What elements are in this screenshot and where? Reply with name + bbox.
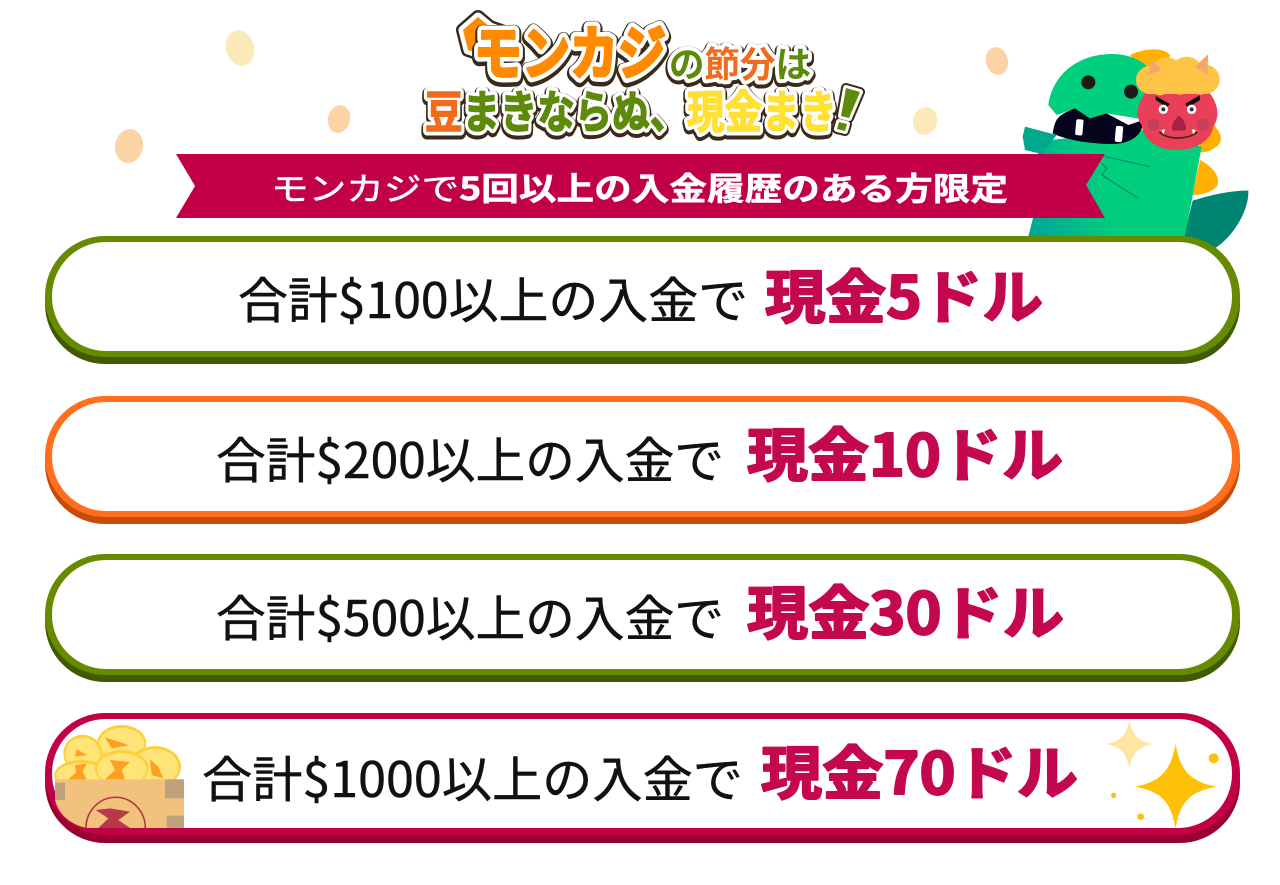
box emblem <box>86 797 145 828</box>
logo line 1: brand: の節分は <box>669 38 811 90</box>
reward text: 現金70ドル <box>761 727 1078 811</box>
pill: $100 tier <box>45 236 1240 364</box>
logo line 2: tagline: 豆まきならぬ、現金まき <box>425 76 837 141</box>
arm <box>1023 127 1057 154</box>
oni mouth <box>1159 132 1197 138</box>
tail <box>1184 191 1248 248</box>
logo line 1: brand: の節分は <box>669 36 811 88</box>
oni face <box>1138 93 1217 150</box>
requirement text: 合計$100以上の入金で <box>238 262 748 333</box>
requirement text: 合計$500以上の入金で <box>216 580 724 651</box>
arm creases <box>1102 157 1150 198</box>
head <box>1048 54 1157 120</box>
oni hair <box>1136 57 1220 95</box>
pill: $1000 tier <box>45 713 1240 843</box>
logo line 1: brand: モンカジ <box>474 7 666 91</box>
mouth <box>1053 108 1143 144</box>
body <box>1027 130 1202 243</box>
ribbon banner <box>176 154 1105 218</box>
decorative beans <box>112 27 1011 165</box>
logo line 1: brand: モンカジ <box>474 9 666 93</box>
eyes <box>1081 75 1095 89</box>
ribbon text: モンカジで 5回以上の入金履歴のある方限定 <box>271 164 1008 210</box>
reward text: 現金10ドル <box>747 409 1063 493</box>
pill: $500 tier <box>45 554 1240 682</box>
logo line 1: brand: モンカジ <box>474 7 666 91</box>
box <box>55 779 184 828</box>
coins <box>54 725 181 790</box>
logo line 2: tagline: 豆まきならぬ、現金まき <box>425 76 837 141</box>
oni horns <box>1148 58 1162 75</box>
logo line 1: brand: の節分は <box>669 36 811 88</box>
oni brows <box>1156 95 1200 107</box>
icon: sparkles <box>1105 719 1219 828</box>
oni nose and cheeks <box>1172 116 1186 131</box>
mascot: green monster with red oni mask <box>1023 49 1248 248</box>
orange spines <box>1130 49 1221 195</box>
icon: coin box <box>54 725 184 828</box>
exclamation mark <box>837 88 860 131</box>
logo line 2: tagline: 豆まきならぬ、現金まき <box>425 78 837 143</box>
requirement text: 合計$200以上の入金で <box>216 422 724 493</box>
reward text: 現金5ドル <box>765 251 1043 335</box>
requirement text: 合計$1000以上の入金で <box>202 741 743 812</box>
title logo <box>425 7 860 143</box>
oni eyes <box>1159 105 1168 114</box>
logo line 1: brand <box>463 7 811 93</box>
pill: $200 tier <box>45 396 1240 524</box>
coin emblems <box>67 737 163 780</box>
teeth <box>1075 119 1084 136</box>
reward text: 現金30ドル <box>747 567 1064 651</box>
